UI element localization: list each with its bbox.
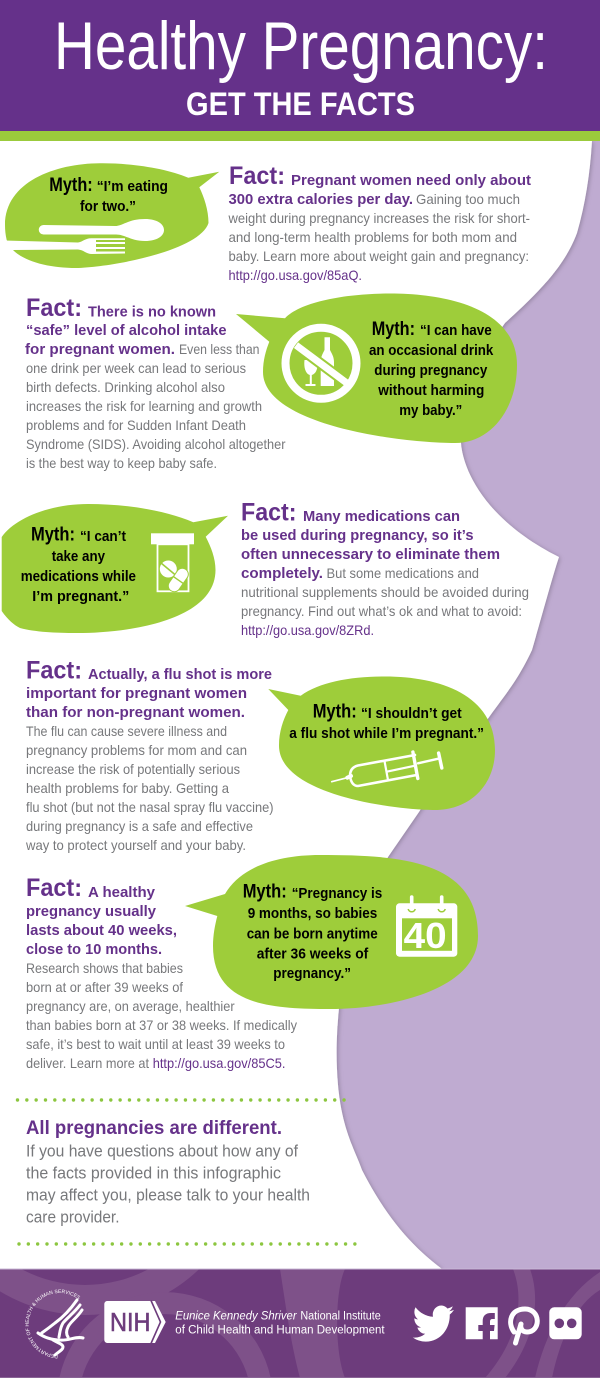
- myth bubble 2: occasional drink: [236, 294, 517, 443]
- myth text: “Pregnancy is: [292, 885, 382, 902]
- fact 4 text: health problems for baby. Getting a: [26, 781, 229, 796]
- myth bubble 1: eating for two: [4, 163, 219, 268]
- fact 3 text: Many medications can: [303, 509, 460, 525]
- fact 2 text: Even less than: [179, 342, 260, 357]
- fact 3 text: completely.: [241, 566, 323, 582]
- closing note: All pregnancies are different.: [26, 1118, 282, 1139]
- subtitle: GET THE FACTS: [186, 86, 415, 122]
- fact 1 text: Pregnant women need only about: [291, 173, 531, 189]
- fact 3 text: http://go.usa.gov/8ZRd.: [241, 623, 374, 638]
- myth text: after 36 weeks of: [257, 945, 369, 962]
- closing note: the facts provided in this infographic: [26, 1164, 281, 1182]
- fact 5 text: born at or after 39 weeks of: [26, 980, 183, 995]
- fact 1 text: Fact:: [229, 162, 285, 190]
- icon: twitter: [413, 1306, 454, 1342]
- fact 3 text: [241, 499, 529, 638]
- fact 4 text: increase the risk of potentially serious: [26, 762, 240, 777]
- fact 3 text: pregnancy. Find out what’s ok and what to avoid:: [241, 604, 522, 619]
- icon: no alcohol: [286, 328, 356, 399]
- fact 5 text: deliver. Learn more at: [26, 1056, 149, 1071]
- fact 2 text: “safe” level of alcohol intake: [26, 323, 226, 339]
- fact 3 text: be used during pregnancy, so it’s: [241, 528, 474, 544]
- dotted divider top: [18, 1098, 345, 1102]
- fact 5 text: http://go.usa.gov/85C5.: [153, 1056, 286, 1071]
- myth text: Myth:: [313, 702, 357, 723]
- fact 5 text: pregnancy usually: [26, 904, 156, 920]
- myth text: Myth:: [243, 882, 287, 903]
- myth text: medications while: [21, 568, 136, 585]
- fact 2 text: increases the risk for learning and growth: [26, 399, 262, 414]
- fact 5 text: Fact:: [26, 874, 82, 902]
- fact 3 text: often unnecessary to eliminate them: [241, 547, 500, 563]
- icon: spoon: [39, 219, 164, 241]
- fact 4 text: The flu can cause severe illness and: [26, 724, 227, 739]
- icon: fork: [4, 238, 125, 254]
- icon: calendar 40: 40: [404, 915, 447, 956]
- fact 2 text: There is no known: [88, 304, 216, 320]
- fact 3 text: Fact:: [241, 499, 296, 527]
- myth text: 9 months, so babies: [248, 905, 377, 922]
- myth text: “I shouldn’t get: [361, 705, 462, 722]
- myth text: Myth:: [31, 525, 75, 546]
- logo: NIH: [104, 1300, 166, 1344]
- fact 4 text: pregnancy problems for mom and can: [26, 743, 247, 758]
- header banner: [0, 0, 600, 141]
- fact 2 text: for pregnant women.: [25, 342, 175, 358]
- myth text: pregnancy.”: [273, 965, 351, 982]
- myth bubble 5: 36 weeks: [185, 855, 478, 1009]
- myth text: [243, 882, 382, 982]
- icon: syringe: [332, 752, 442, 786]
- myth text: “I can have: [420, 322, 492, 339]
- myth bubble 4: flu shot: [268, 676, 495, 810]
- fact 1 text: 300 extra calories per day.: [228, 192, 413, 208]
- fact 2 text: Fact:: [26, 294, 82, 322]
- myth text: take any: [52, 548, 106, 565]
- dotted divider bottom: [19, 1242, 356, 1246]
- fact 2 text: [25, 294, 286, 471]
- fact 1 text: weight during pregnancy increases the risk for short-: [228, 211, 530, 226]
- myth text: during pregnancy: [374, 362, 488, 379]
- fact 4 text: way to protect yourself and your baby.: [25, 838, 246, 853]
- myth text: Myth:: [372, 319, 415, 340]
- fact 4 text: than for non-pregnant women.: [26, 705, 245, 721]
- fact 1 text: [228, 162, 531, 283]
- fact 5 text: safe, it’s best to wait until at least 39 weeks to: [26, 1037, 285, 1052]
- myth text: I’m pregnant.”: [32, 588, 129, 605]
- closing note: care provider.: [26, 1208, 120, 1226]
- myth text: “I can’t: [80, 528, 126, 545]
- myth text: [369, 319, 494, 419]
- myth text: [49, 175, 168, 215]
- institute name: National Institute: [300, 1310, 381, 1322]
- icon: pill bottle: [151, 533, 194, 594]
- fact 5 text: close to 10 months.: [26, 942, 162, 958]
- fact 5 text: A healthy: [88, 885, 155, 901]
- institute name: Eunice Kennedy Shriver: [175, 1310, 298, 1322]
- myth bubble 3: medications: [2, 504, 228, 633]
- myth text: can be born anytime: [247, 925, 378, 942]
- logo: NIH: NIH: [110, 1307, 150, 1337]
- myth text: without harming: [377, 382, 484, 399]
- fact 5 text: Research shows that babies: [26, 961, 183, 976]
- fact 5 text: than babies born at 37 or 38 weeks. If medically: [26, 1018, 297, 1033]
- fact 4 text: [25, 657, 274, 853]
- myth text: for two.”: [80, 198, 136, 215]
- fact 3 text: But some medications and: [326, 566, 479, 581]
- icon: facebook: [466, 1307, 498, 1339]
- fact 2 text: is the best way to keep baby safe.: [26, 456, 217, 471]
- closing note: If you have questions about how any of: [26, 1142, 298, 1161]
- fact 4 text: important for pregnant women: [26, 686, 247, 702]
- fact 2 text: problems and for Sudden Infant Death: [26, 418, 246, 433]
- fact 1 text: and long-term health problems for both mom and: [228, 230, 517, 245]
- fact 5 text: pregnancy are, on average, healthier: [26, 999, 235, 1014]
- logo: HHS seal: DEPARTMENT OF HEALTH & HUMAN SERVICES-USA: [25, 1290, 80, 1358]
- closing note: may affect you, please talk to your health: [26, 1186, 310, 1204]
- myth text: [21, 525, 136, 605]
- fact 4 text: flu shot (but not the nasal spray flu vaccine): [26, 800, 274, 815]
- icon: calendar 40: [396, 897, 457, 957]
- institute name: [175, 1310, 385, 1336]
- fact 3 text: nutritional supplements should be avoided during: [241, 585, 529, 600]
- institute name: of Child Health and Human Development: [175, 1324, 385, 1336]
- myth text: my baby.”: [399, 402, 462, 419]
- fact 1 text: Gaining too much: [416, 192, 520, 207]
- fact 1 text: http://go.usa.gov/85aQ.: [228, 268, 362, 283]
- myth text: a flu shot while I’m pregnant.”: [289, 725, 484, 742]
- fact 2 text: one drink per week can lead to serious: [26, 361, 246, 376]
- myth text: Myth:: [49, 175, 93, 196]
- myth text: [289, 702, 484, 742]
- fact 1 text: baby. Learn more about weight gain and pregnancy:: [228, 249, 529, 264]
- fact 4 text: Fact:: [26, 657, 82, 685]
- fact 4 text: Actually, a flu shot is more: [88, 667, 272, 683]
- fact 2 text: birth defects. Drinking alcohol also: [26, 380, 225, 395]
- icon: flickr: [549, 1307, 582, 1339]
- fact 5 text: [26, 874, 297, 1071]
- fact 4 text: during pregnancy is a safe and effective: [26, 819, 253, 834]
- fact 5 text: lasts about 40 weeks,: [26, 923, 177, 939]
- icon: pinterest: [511, 1309, 537, 1343]
- fact 2 text: Syndrome (SIDS). Avoiding alcohol altogether: [26, 437, 286, 452]
- myth text: “I’m eating: [97, 178, 168, 195]
- closing note: [26, 1118, 310, 1226]
- logo: HHS seal: [25, 1290, 84, 1358]
- myth text: an occasional drink: [369, 342, 494, 359]
